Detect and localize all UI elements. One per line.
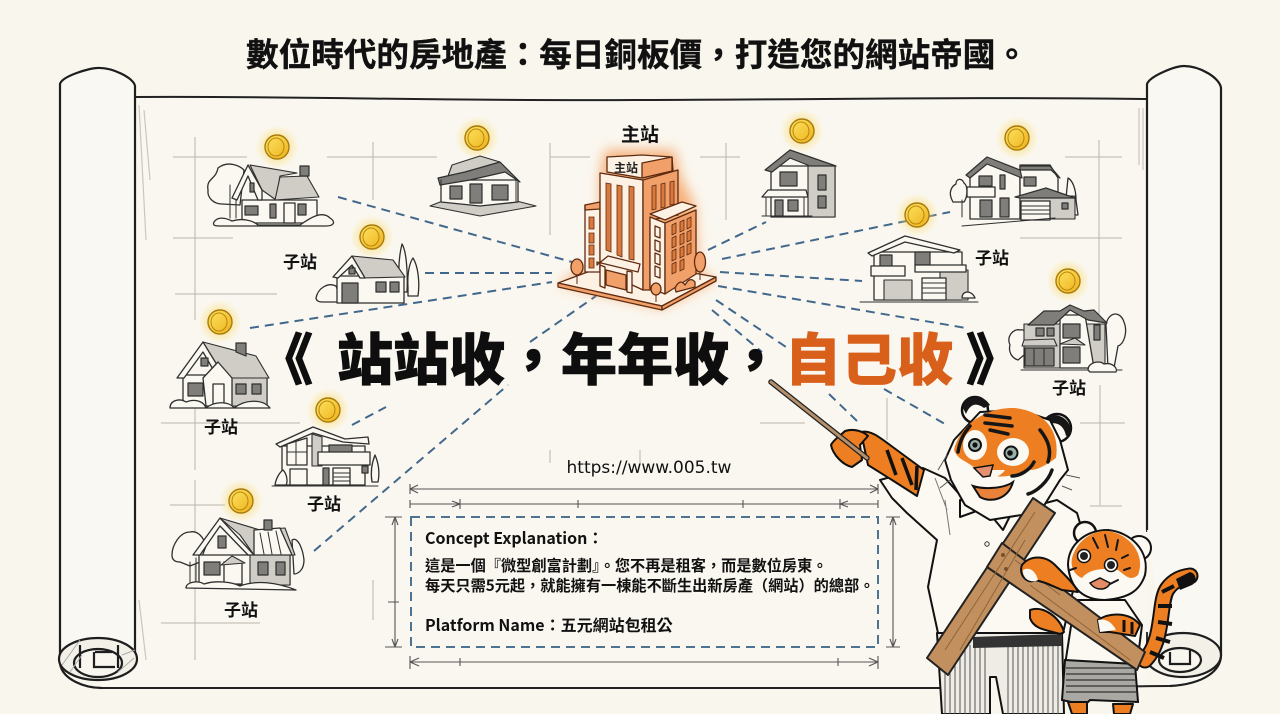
house 7 with coin	[1009, 259, 1126, 372]
scroll: right roll	[1145, 66, 1221, 686]
cub tail	[1145, 572, 1196, 660]
concept explanation panel	[411, 517, 878, 647]
pointer stick	[771, 382, 867, 458]
house 8 with coin	[170, 300, 270, 408]
slogan: ，	[505, 316, 561, 397]
concept body text: 每天只需5元起，就能擁有一棟能不斷生出新房產（網站）的總部。	[425, 574, 874, 596]
wooden T-square	[927, 498, 1145, 675]
dimension lines	[385, 484, 900, 669]
title: 數位時代的房地產：每日銅板價，打造您的網站帝國。	[246, 29, 1028, 76]
adult tiger trousers	[937, 633, 1064, 714]
scroll paper	[100, 97, 1170, 689]
cub head	[1068, 522, 1151, 600]
house 10 with coin	[172, 479, 304, 590]
slogan: 年年收	[561, 316, 729, 397]
adult tiger head	[938, 397, 1080, 520]
adult tiger belt	[973, 634, 1062, 648]
slogan: 站站收	[337, 316, 505, 397]
cub paws	[1021, 558, 1140, 636]
main site building: 主站	[614, 159, 638, 176]
label: sub-site: 子站	[283, 248, 317, 273]
house 6 with coin	[860, 193, 978, 302]
adult tiger hand	[831, 430, 868, 467]
dashed network connections	[250, 197, 966, 551]
scroll: left roll	[59, 68, 137, 688]
website URL: https://www.005.tw	[567, 458, 732, 478]
adult tiger arm	[861, 432, 924, 496]
house 4 with coin	[762, 109, 836, 217]
label: sub-site: 子站	[224, 596, 258, 621]
slogan: 《	[257, 316, 313, 397]
label: main site: 主站	[621, 120, 659, 147]
label: sub-site: 子站	[1052, 374, 1086, 399]
house 1 with coin	[208, 125, 333, 226]
label: sub-site: 子站	[307, 490, 341, 515]
blueprint grid lines	[161, 137, 1125, 660]
main site building	[558, 150, 716, 310]
slogan: 》	[966, 316, 1022, 397]
concept heading: Concept Explanation：	[425, 525, 603, 549]
slogan: ，	[727, 316, 783, 397]
platform name: Platform Name：五元網站包租公	[425, 612, 673, 636]
label: sub-site: 子站	[975, 244, 1009, 269]
label: sub-site: 子站	[204, 413, 238, 438]
concept body text: 這是一個『微型創富計劃』。您不再是租客，而是數位房東。	[425, 554, 827, 576]
house 3 with coin	[316, 215, 419, 303]
house 2 with coin	[430, 116, 536, 216]
tiger teacher illustration	[771, 382, 1196, 714]
house 9 with coin	[272, 388, 379, 486]
house 5 with coin	[950, 116, 1078, 226]
cub body	[1030, 600, 1142, 714]
adult tiger shirt	[880, 468, 1085, 633]
slogan: 自己收	[785, 316, 953, 397]
